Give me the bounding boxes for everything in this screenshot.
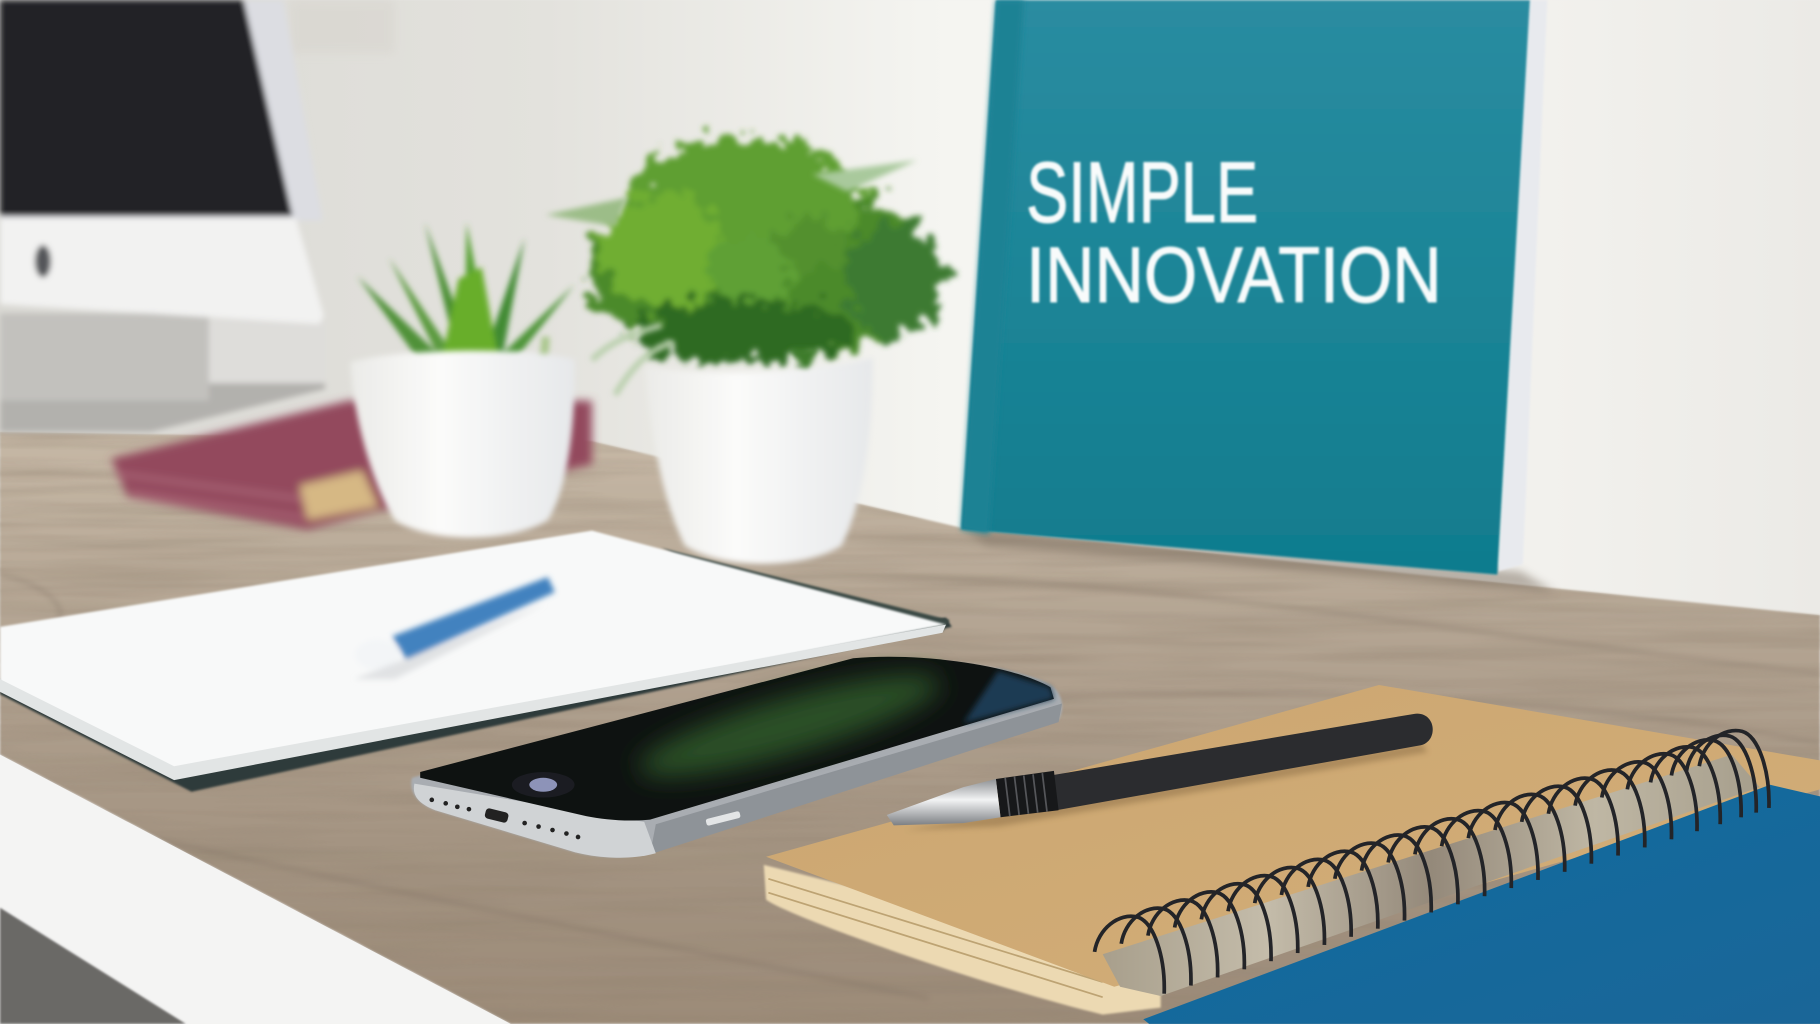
white document folder [0,531,952,792]
book cover [961,0,1530,575]
notebook page edges [764,865,1161,1015]
pen grip [996,771,1059,817]
teal book [961,0,1547,575]
phone camera [512,772,575,798]
floor shadow under the desk [0,908,186,1024]
desk white front edge [0,755,511,1024]
book title: INNOVATION [1026,231,1442,319]
book spine crease [961,0,1024,534]
phone side button [705,811,741,826]
book pages [1498,0,1547,571]
metal binding band [1103,755,1760,996]
pen chrome tip [887,779,1001,825]
book title [1026,145,1442,319]
monitor logo [35,245,51,278]
spiral coil [1095,731,1769,994]
monitor chin [0,218,324,324]
phone ports [429,798,580,839]
book title: SIMPLE [1026,145,1258,241]
phone body [411,659,1062,857]
desk surface [0,432,1820,1024]
monitor stand neck [0,314,209,401]
red wallet [111,401,592,529]
monitor screen [0,0,292,216]
book shadow on desk [961,528,1555,592]
smartphone [411,656,1062,858]
notebook cover [766,685,1820,987]
monitor stand base [0,372,325,432]
pen barrel [1050,714,1433,810]
monitor bezel [0,0,323,221]
wall poster blur [290,0,395,54]
phone screen [420,657,1054,821]
kraft spiral notebook [764,685,1820,1024]
paper sheet [0,531,946,773]
small plant [358,223,575,395]
monitor [0,0,325,432]
wall [0,0,1820,650]
black pen [887,714,1433,830]
blue pen on paper [354,577,555,679]
blue back cover [1143,785,1820,1024]
small white pot [351,351,575,538]
large white pot [645,358,873,564]
pen shadow [905,743,1428,830]
phone screen reflection [631,656,948,796]
folder dark backing [0,618,952,792]
large plant [546,136,942,395]
phone edge highlight [650,704,1062,854]
